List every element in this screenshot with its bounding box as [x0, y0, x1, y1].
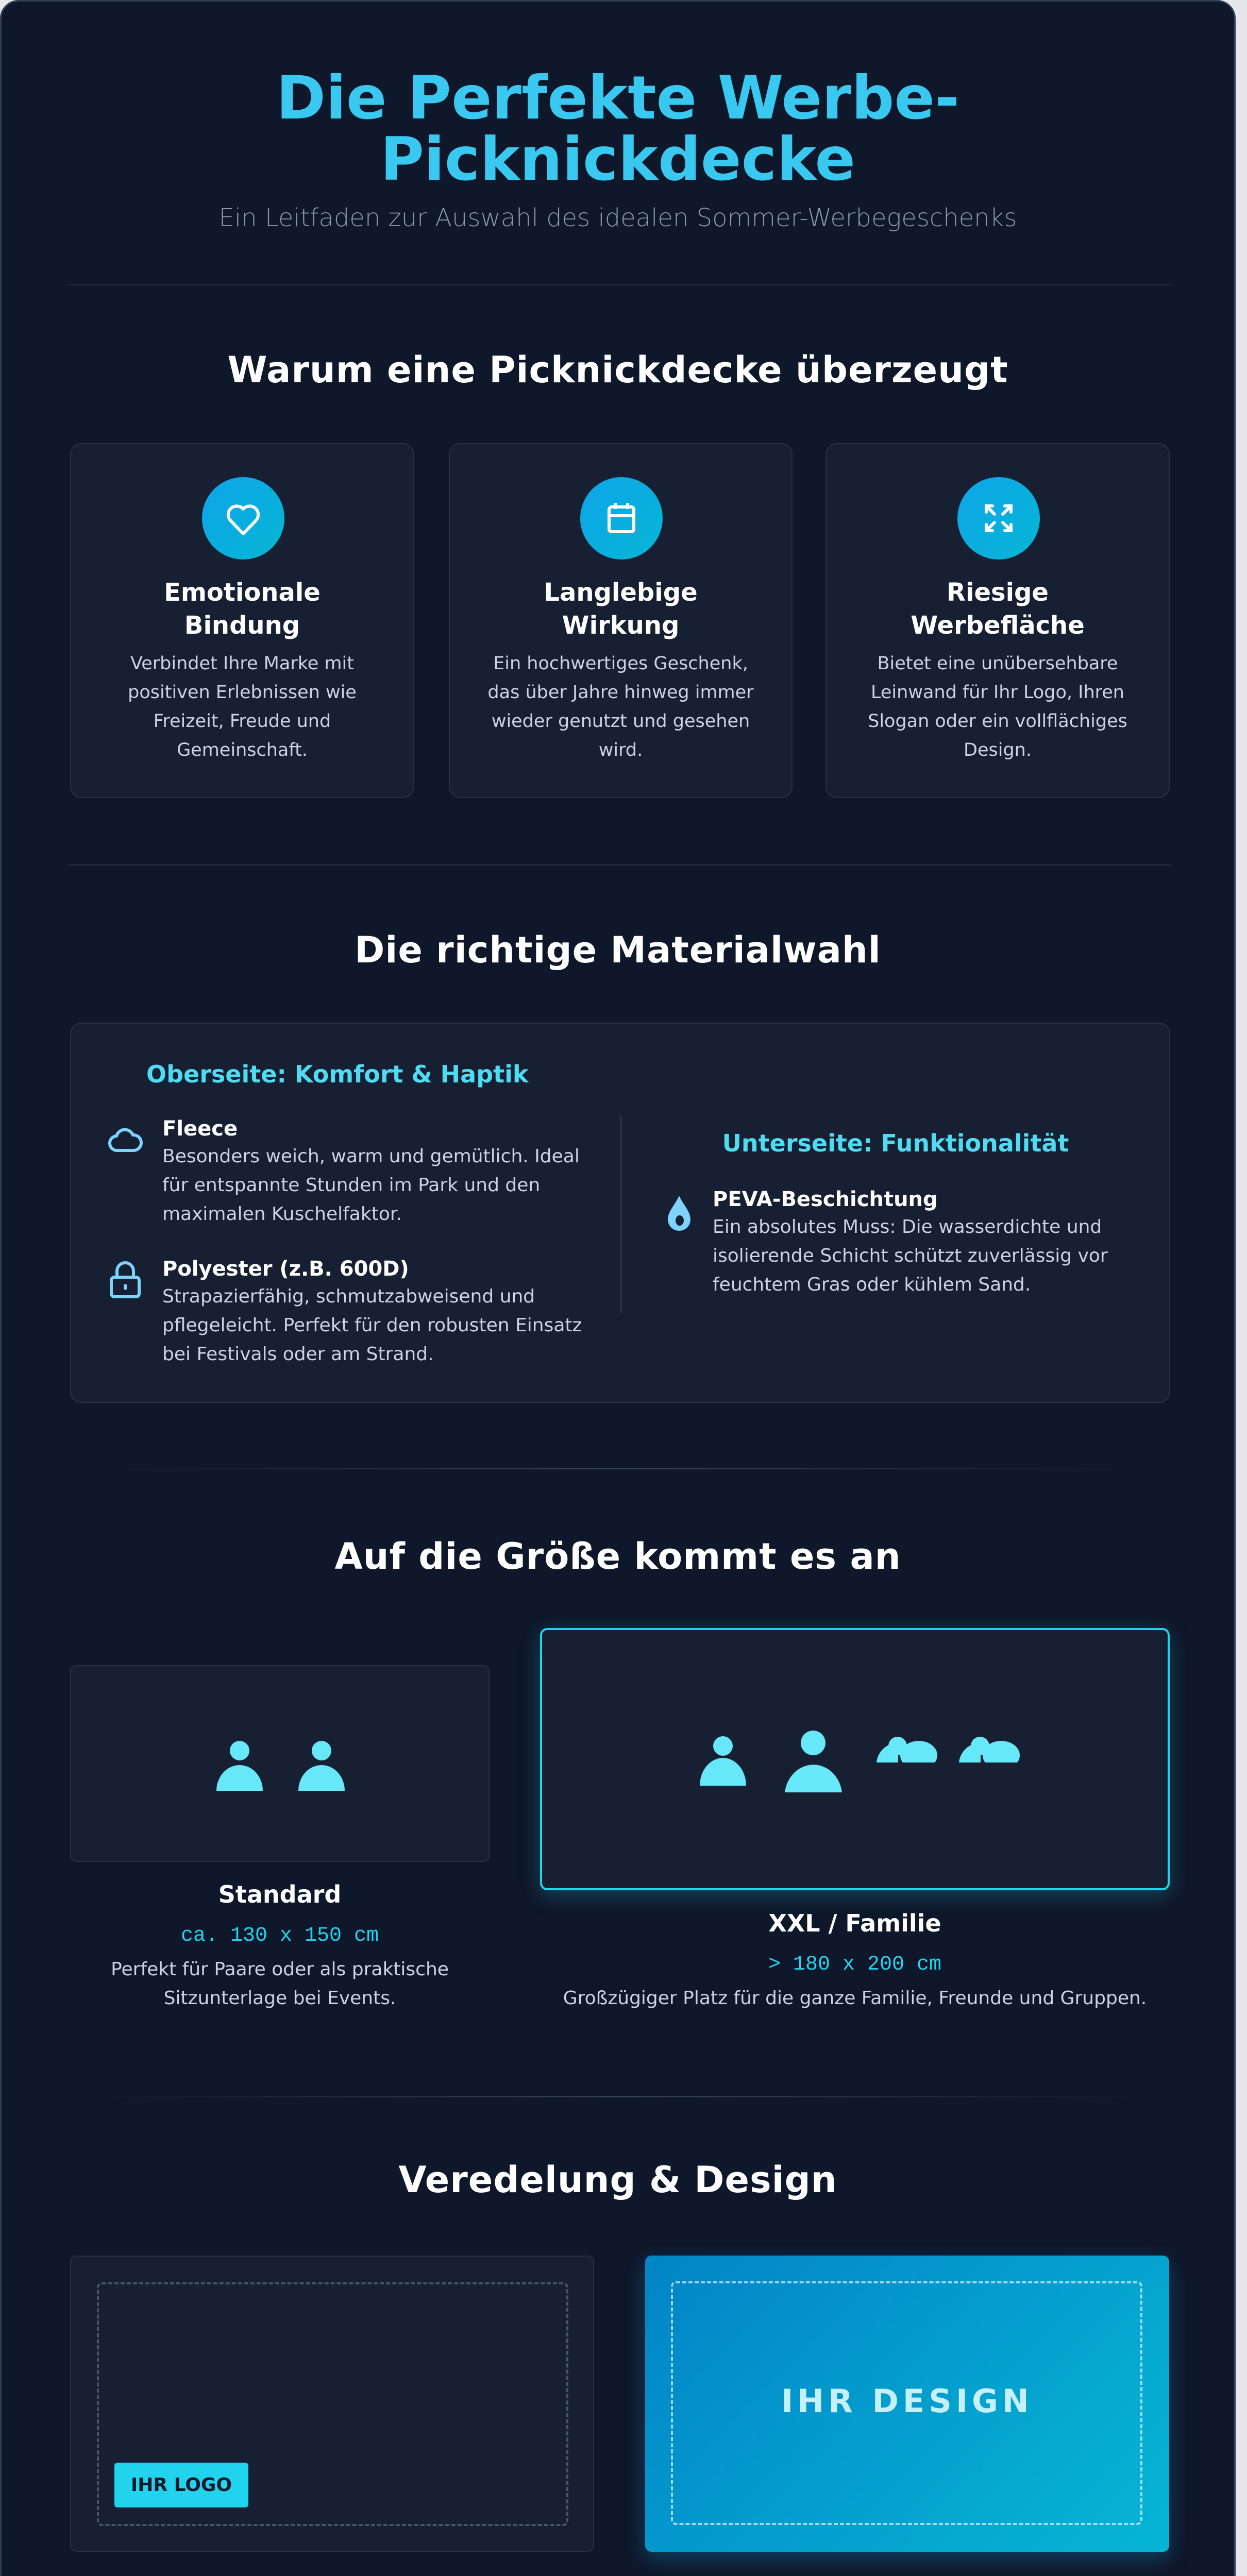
card text: Leinwand für Ihr Logo, Ihren — [871, 682, 1124, 703]
card text: das über Jahre hinweg immer — [487, 682, 754, 703]
card: Emotionale Bindung — [70, 443, 414, 798]
panel: materials: feuchtem Gras oder kühlem Sand. — [713, 1274, 1031, 1295]
panel: materials: bei Festivals oder am Strand. — [162, 1344, 434, 1365]
panel: XXL size — [540, 1628, 1170, 1890]
card text: Bietet eine unübersehbare — [878, 653, 1118, 674]
card title: Riesige — [947, 578, 1049, 607]
card title: Emotionale — [164, 578, 321, 607]
card text: Design. — [964, 740, 1032, 760]
card text — [128, 653, 357, 760]
icon: heart — [202, 477, 284, 560]
vertical divider — [620, 1115, 621, 1313]
card text: wird. — [599, 740, 643, 760]
panel: Standard size — [70, 1665, 490, 1862]
card text: Verbindet Ihre Marke mit — [130, 653, 354, 674]
card text: Slogan oder ein vollflächiges — [868, 711, 1127, 732]
heading: Warum: Warum eine Picknickdecke überzeugt — [227, 349, 1008, 391]
card text — [487, 653, 754, 760]
text: XXL: Großzügiger Platz für die ganze Familie, Freunde und Gruppen. — [563, 1988, 1147, 2009]
card title — [164, 578, 321, 640]
icon: drop — [668, 1196, 690, 1231]
card title: Wirkung — [562, 611, 679, 640]
card title — [911, 578, 1085, 640]
badge: IHR LOGO: IHR LOGO — [131, 2475, 232, 2496]
panel: full print — [645, 2256, 1169, 2552]
panel: materials: maximalen Kuschelfaktor. — [162, 1204, 402, 1225]
card title: Werbefläche — [911, 611, 1085, 640]
text: XXL: XXL / Familie — [768, 1909, 941, 1937]
text: Standard: Perfekt für Paare oder als praktische — [111, 1959, 449, 1980]
text: Standard: Sitzunterlage bei Events. — [164, 1988, 396, 2009]
text: IHR DESIGN: IHR DESIGN — [781, 2382, 1033, 2420]
text: Vollflächiger Druck — [645, 2574, 1169, 2576]
heading: Materialwahl: Die richtige Materialwahl — [355, 929, 881, 971]
heading: Unterseite: Unterseite: Funktionalität — [722, 1129, 1069, 1157]
card text: positiven Erlebnissen wie — [128, 682, 357, 703]
text: XXL — [563, 1909, 1147, 2009]
title: Die Perfekte Werbe- — [276, 63, 959, 133]
icon: calendar — [580, 477, 663, 560]
text: Standard: ca. 130 x 150 cm — [181, 1924, 379, 1947]
card: Langlebige Wirkung — [449, 443, 793, 798]
card text: Gemeinschaft. — [177, 740, 308, 760]
text: XXL: > 180 x 200 cm — [768, 1953, 941, 1976]
card: Riesige Werbefläche — [825, 443, 1170, 798]
panel: materials: pflegeleicht. Perfekt für den robusten Einsatz — [162, 1315, 582, 1336]
panel: materials — [70, 1023, 1170, 1403]
panel: logo placement — [70, 2256, 594, 2552]
card title — [544, 578, 698, 640]
card text: Freizeit, Freude und — [154, 711, 331, 732]
title — [276, 63, 959, 194]
item: Polyester: Polyester (z.B. 600D) — [162, 1257, 409, 1281]
title: Picknickdecke — [380, 125, 855, 194]
subtitle: Ein Leitfaden zur Auswahl des idealen Sommer-Werbegeschenks — [219, 204, 1017, 232]
card title: Bindung — [184, 611, 300, 640]
badge: IHR LOGO — [114, 2463, 248, 2507]
icon: two persons — [216, 1741, 345, 1791]
card title: Langlebige — [544, 578, 698, 607]
text: Standard: Standard — [218, 1880, 341, 1908]
heading: Oberseite: Oberseite: Komfort & Haptik — [146, 1060, 528, 1088]
panel: materials: für entspannte Stunden im Park und den — [162, 1175, 540, 1196]
icon: cloud — [108, 1128, 143, 1152]
item: PEVA: PEVA-Beschichtung — [713, 1188, 938, 1211]
panel: materials: Besonders weich, warm und gemütlich. Ideal — [162, 1146, 580, 1167]
icon: expand arrows — [957, 477, 1040, 560]
item: Fleece: Fleece — [162, 1117, 238, 1141]
icon: family — [700, 1731, 1020, 1792]
panel: materials: Strapazierfähig, schmutzabweisend und — [162, 1286, 535, 1307]
heading: Veredelung: Veredelung & Design — [398, 2159, 837, 2201]
card text: Ein hochwertiges Geschenk, — [493, 653, 748, 674]
text: Standard — [111, 1880, 449, 2009]
card text: wieder genutzt und gesehen — [492, 711, 750, 732]
panel: materials: Ein absolutes Muss: Die wasserdichte und — [713, 1216, 1102, 1238]
panel: materials: isolierende Schicht schützt zuverlässig vor — [713, 1245, 1108, 1266]
icon: lock — [110, 1261, 141, 1298]
text: Dezente Platzierung — [70, 2574, 594, 2576]
heading: Größe: Auf die Größe kommt es an — [334, 1535, 901, 1578]
card text — [868, 653, 1127, 760]
